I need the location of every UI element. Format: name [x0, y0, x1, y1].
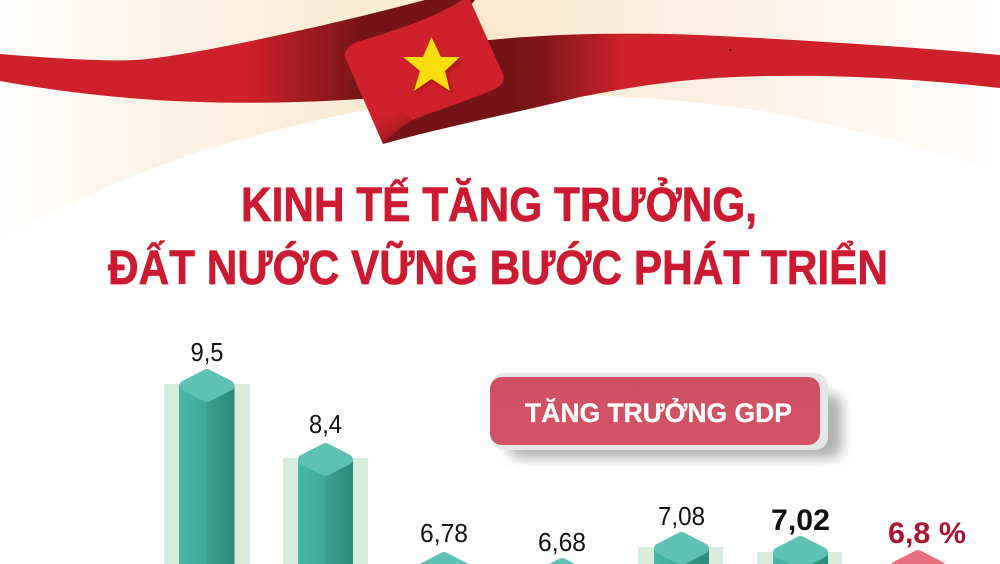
icon: yellow star: [403, 37, 460, 91]
bar 7,02 highlighted: 7,02: [771, 504, 830, 537]
bar 7,08: [638, 501, 723, 564]
title line 1: KINH TẾ TĂNG TRƯỞNG,: [241, 177, 757, 232]
bar 9,5: 9,5: [190, 337, 224, 367]
flag panel: [345, 0, 504, 144]
flag: bottom tip shading: [372, 108, 413, 144]
bar 6,8 % forecast: [888, 517, 966, 564]
flag: star shadow: [405, 40, 463, 94]
bar chart: [164, 337, 966, 564]
bar 6,68: 6,68: [538, 527, 586, 557]
GDP badge: [490, 373, 842, 458]
title line 2: ĐẤT NƯỚC VỮNG BƯỚC PHÁT TRIỂN: [108, 240, 888, 295]
badge label: TĂNG TRƯỞNG GDP: [525, 396, 792, 428]
bar 6,78: [420, 518, 468, 564]
ribbon speck: [730, 49, 732, 51]
ribbon: right section: [383, 34, 1000, 144]
title: [108, 177, 888, 295]
ribbon: left section: [0, 0, 475, 103]
bar 8,4: [283, 409, 368, 564]
bar 8,4: 8,4: [309, 409, 342, 439]
bar 6,8 % forecast: 6,8 %: [888, 517, 966, 550]
bar 7,02 highlighted: [757, 504, 842, 564]
bar 6,78: 6,78: [420, 518, 468, 548]
cream background band: [0, 0, 1000, 241]
bar 7,08: 7,08: [658, 501, 705, 531]
bar 9,5: [164, 337, 250, 564]
